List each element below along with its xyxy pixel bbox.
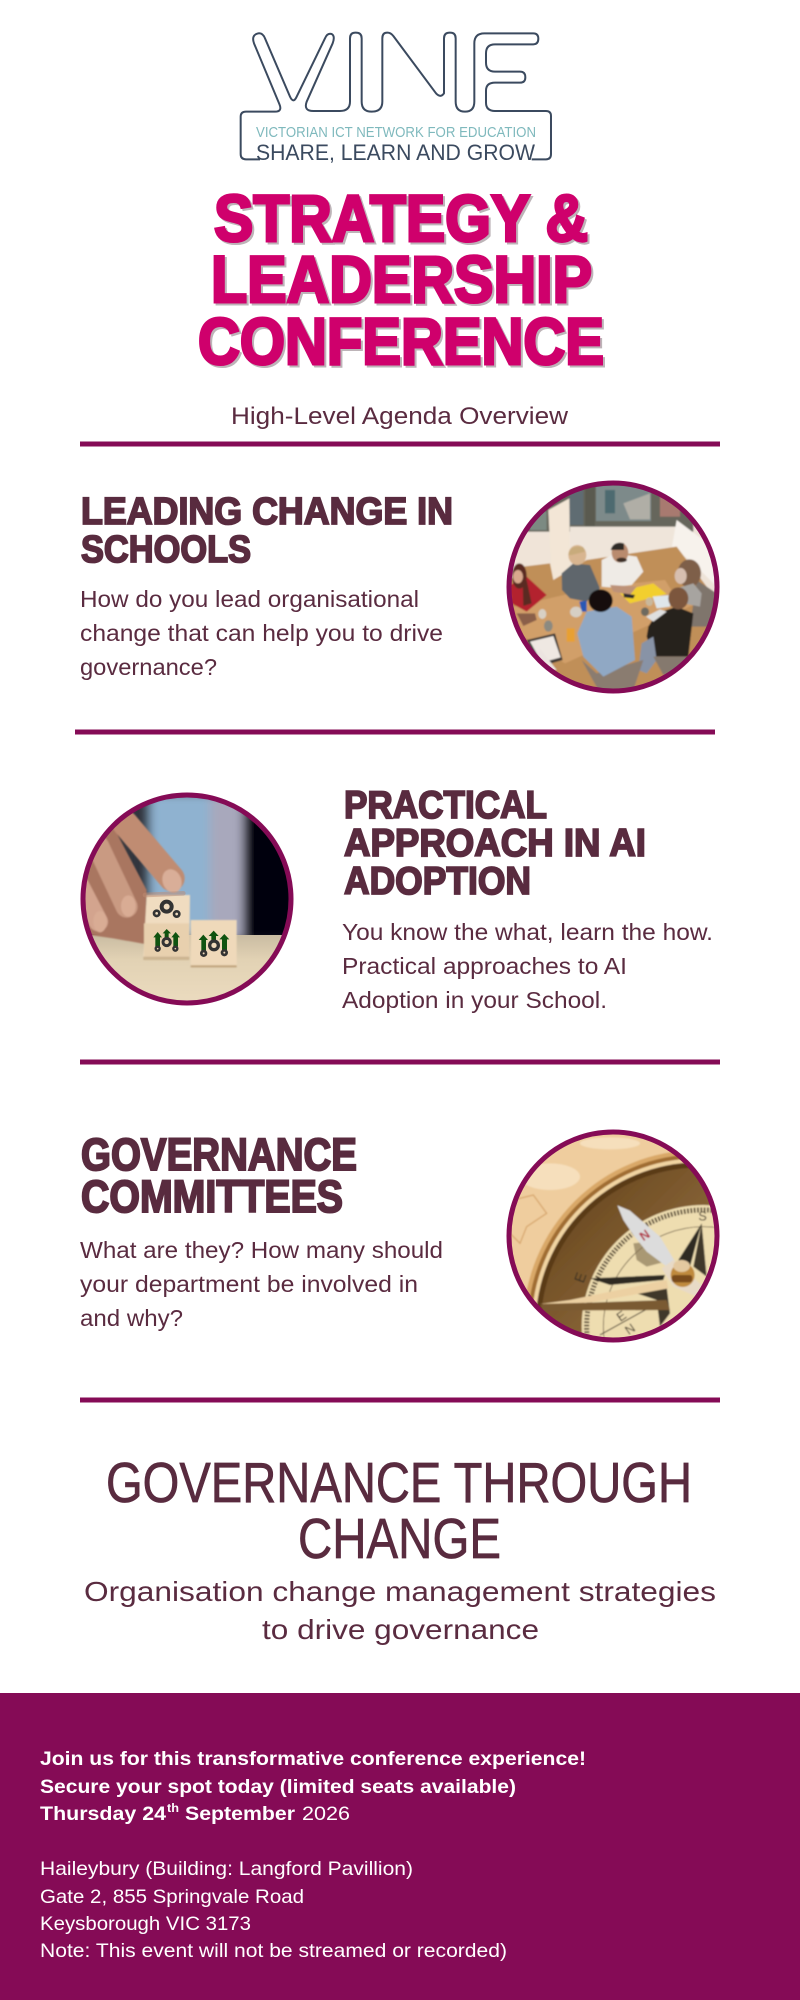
title: STRATEGY &: [214, 181, 588, 255]
description: [80, 586, 443, 680]
logo outline: [241, 33, 551, 159]
photo: hand stacking wooden blocks: [77, 793, 297, 1007]
description: Adoption in your School.: [342, 987, 607, 1013]
venue details: Gate 2, 855 Springvale Road: [40, 1886, 304, 1908]
venue details: Haileybury (Building: Langford Pavillion): [40, 1858, 413, 1880]
photo: brass compass: N: [622, 1321, 638, 1338]
title: [198, 181, 606, 380]
call to action: 2026: [302, 1803, 350, 1825]
photo: brass compass: N: [637, 1227, 653, 1244]
call to action: Secure your spot today (limited seats available): [40, 1776, 516, 1798]
title: CONFERENCE: [200, 306, 606, 380]
call to action: September: [185, 1803, 295, 1825]
venue details: Keysborough VIC 3173: [40, 1913, 251, 1935]
heading: [344, 784, 646, 903]
closing subheading: to drive governance: [262, 1614, 539, 1645]
footer panel: [0, 1693, 800, 2000]
venue details: [40, 1858, 507, 1962]
panel: governance committees: [80, 1130, 720, 1342]
closing heading: GOVERNANCE THROUGH: [106, 1451, 692, 1515]
description: your department be involved in: [80, 1271, 418, 1297]
description: [80, 1237, 443, 1331]
heading: [81, 491, 453, 571]
heading: GOVERNANCE: [81, 1129, 357, 1180]
description: and why?: [80, 1305, 183, 1331]
description: How do you lead organisational: [80, 586, 419, 612]
heading: SCHOOLS: [81, 529, 251, 571]
photo: brass compass: S: [698, 1210, 707, 1224]
heading: APPROACH IN AI: [344, 822, 646, 865]
title: LEADERSHIP: [213, 244, 594, 318]
call to action: Join us for this transformative conference experience!: [40, 1748, 586, 1770]
heading: PRACTICAL: [344, 784, 547, 827]
closing subheading: Organisation change management strategies: [84, 1576, 716, 1607]
description: You know the what, learn the how.: [342, 919, 713, 945]
heading: COMMITTEES: [81, 1171, 343, 1222]
title: STRATEGY &: [216, 183, 590, 257]
title: CONFERENCE: [198, 304, 604, 378]
subtitle: High-Level Agenda Overview: [231, 403, 568, 430]
logo tagline: VICTORIAN ICT NETWORK FOR EDUCATION: [256, 125, 536, 141]
logo motto: SHARE, LEARN AND GROW: [256, 140, 535, 165]
description: change that can help you to drive: [80, 620, 443, 646]
call to action: Thursday 24: [40, 1803, 166, 1825]
footer background: [0, 1693, 800, 2000]
heading: [81, 1129, 357, 1222]
photo: team meeting around a table: [507, 480, 720, 693]
photo: brass compass: E: [572, 1270, 591, 1285]
photo: brass compass: [506, 1130, 720, 1342]
closing subheading: [84, 1576, 716, 1645]
description: What are they? How many should: [80, 1237, 443, 1263]
call to action: [40, 1748, 586, 1825]
panel: leading change in schools: [80, 480, 720, 693]
description: governance?: [80, 654, 217, 680]
venue details: Note: This event will not be streamed or recorded): [40, 1940, 507, 1962]
heading: ADOPTION: [344, 860, 531, 903]
closing heading: [106, 1451, 692, 1571]
closing heading: CHANGE: [298, 1507, 501, 1571]
photo: brass compass: E: [614, 1308, 629, 1324]
description: Practical approaches to AI: [342, 953, 627, 979]
call to action: th: [167, 1801, 179, 1815]
title: LEADERSHIP: [211, 242, 592, 316]
heading: LEADING CHANGE IN: [81, 491, 453, 533]
panel: practical approach in AI adoption: [77, 784, 713, 1013]
logo: VINE: [241, 33, 551, 165]
description: [342, 919, 713, 1013]
